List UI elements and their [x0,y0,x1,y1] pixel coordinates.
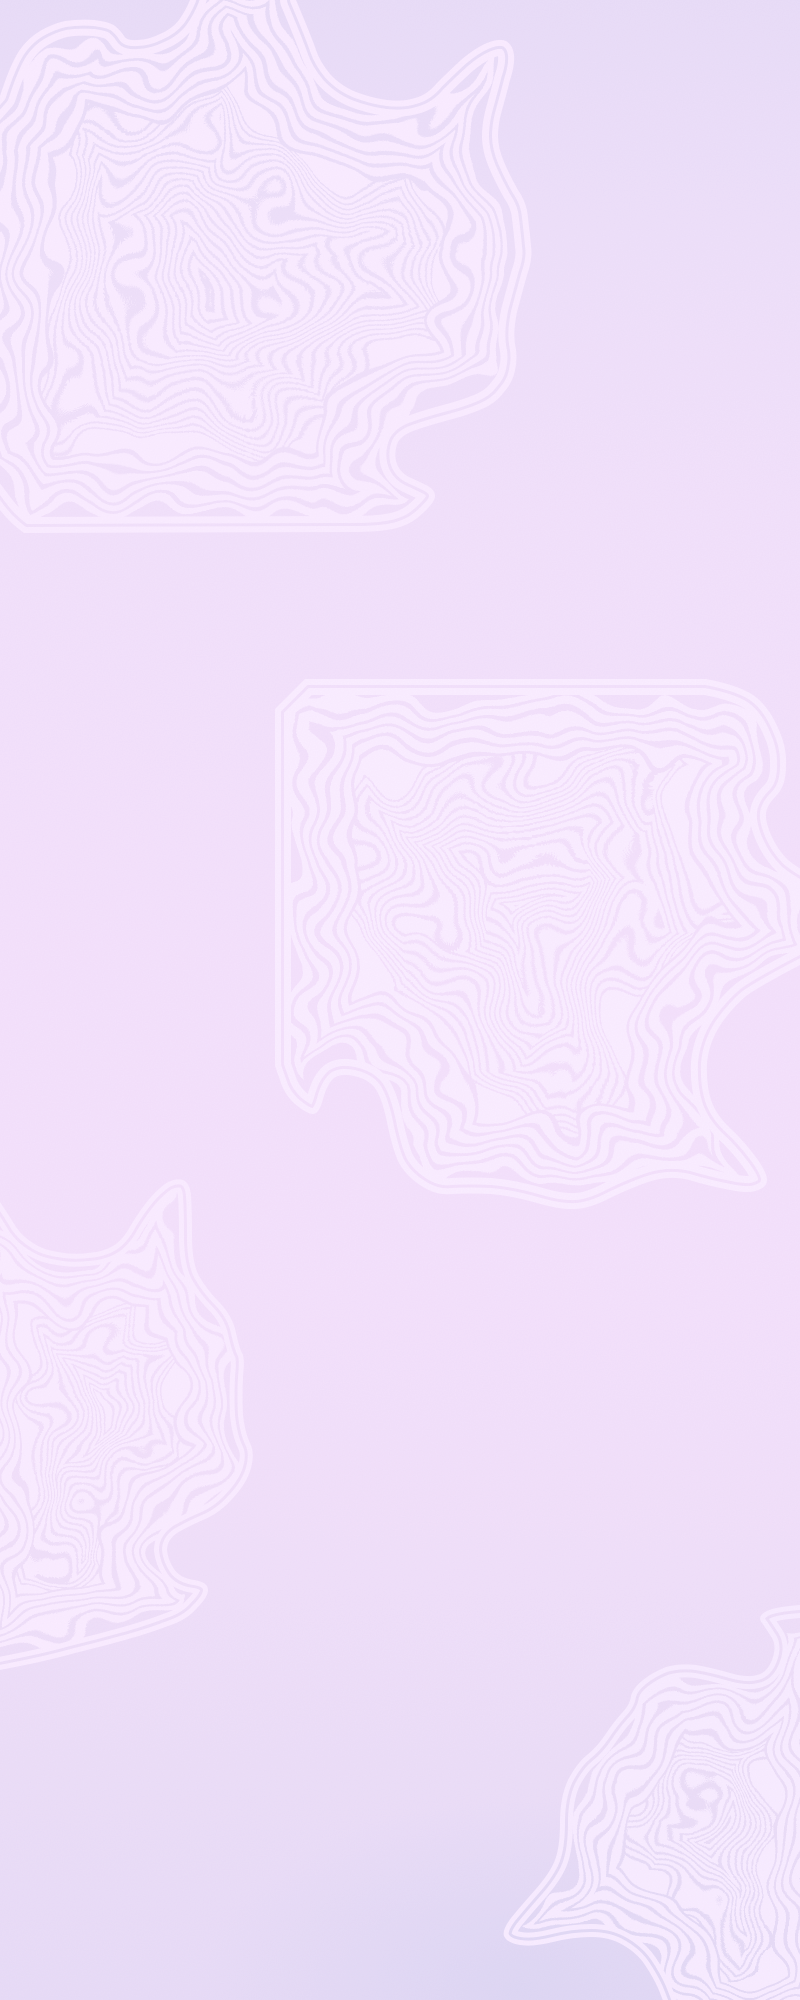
wave blob: centre right [275,679,800,1209]
wave blob: bottom right [504,1605,800,2000]
wave blob: top left [0,0,532,533]
wave blob: lower left [0,1170,253,1678]
